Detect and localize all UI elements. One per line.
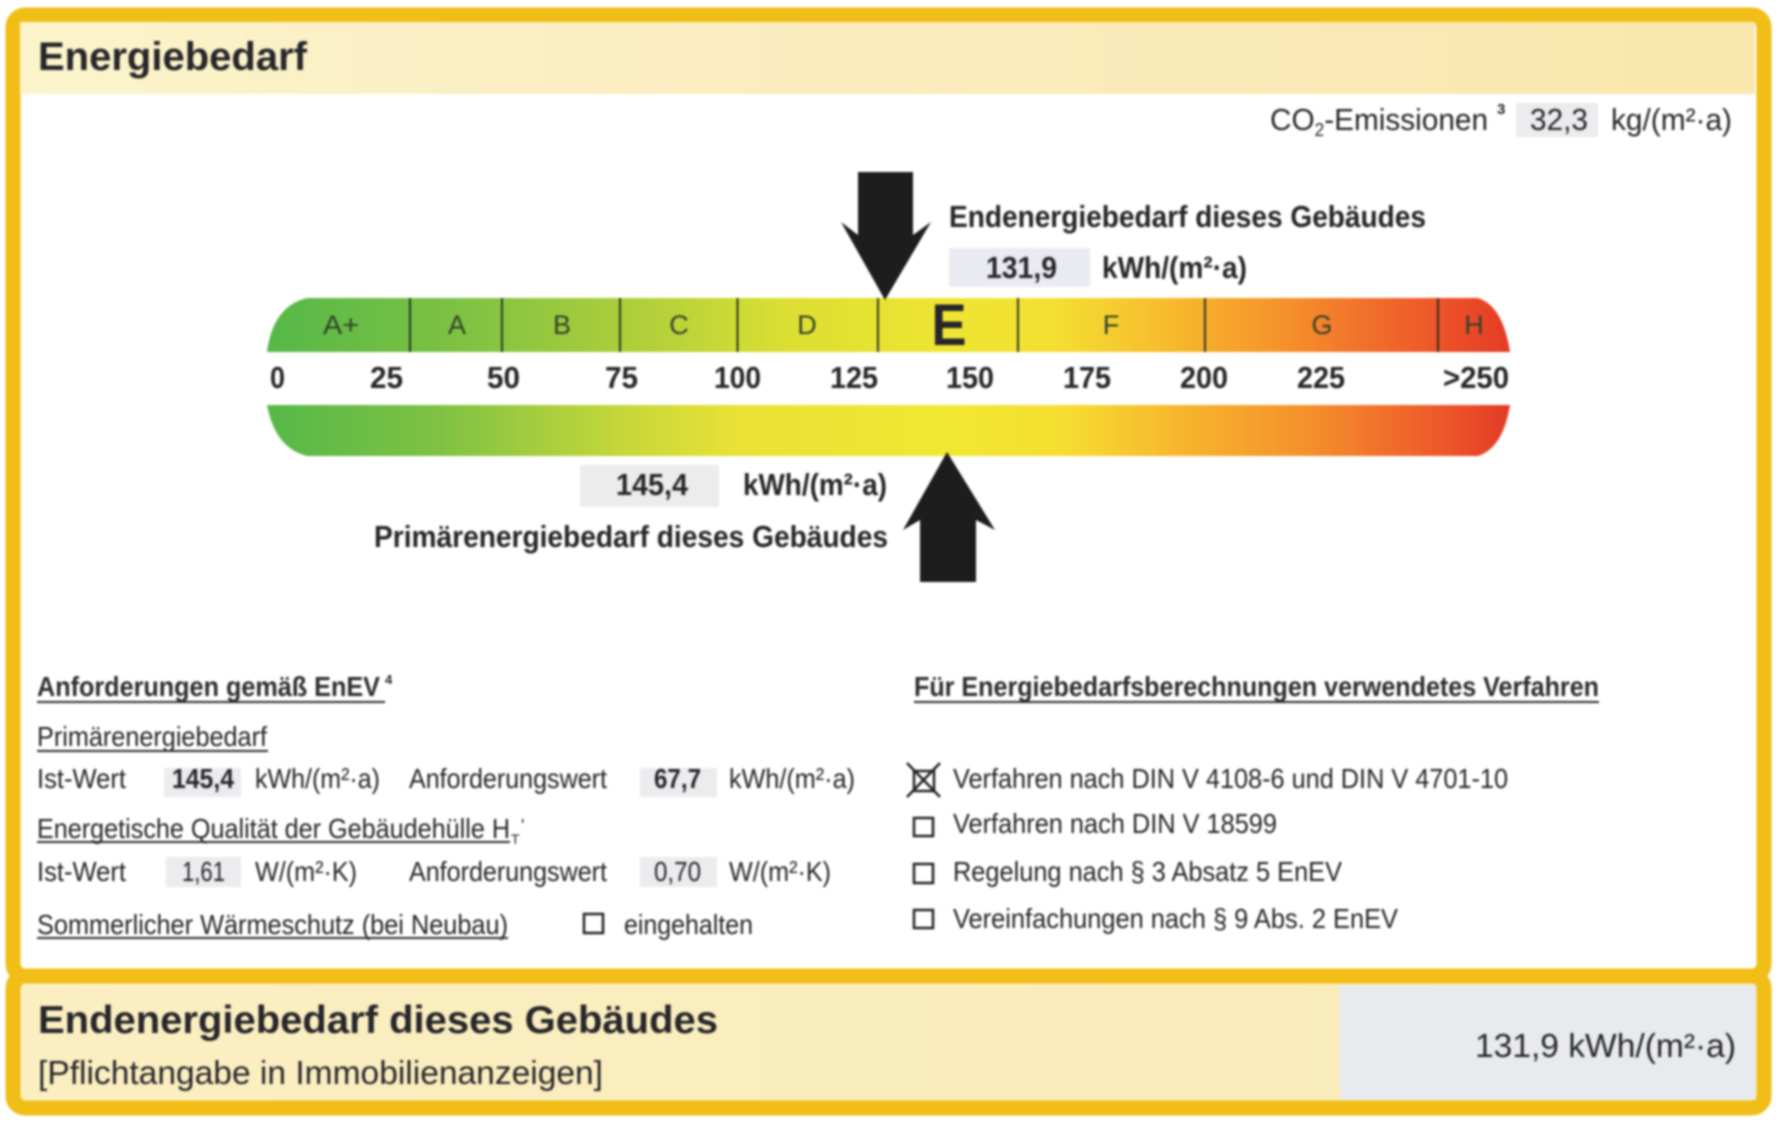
summary heading: Endenergiebedarf dieses Gebäudes <box>38 999 718 1042</box>
summer heat protection: Sommerlicher Wärmeschutz (bei Neubau) <box>37 909 508 940</box>
primary energy requirement: 145,4 <box>172 763 234 794</box>
CO2 emissions line: 32,3 <box>1530 102 1588 137</box>
building envelope quality: Ist-Wert <box>37 856 126 887</box>
summer heat protection: eingehalten <box>624 909 753 940</box>
building envelope quality <box>37 813 831 887</box>
scale numbers: >250 <box>1443 360 1509 395</box>
option: Vereinfachungen: Vereinfachungen nach § 9 Abs. 2 EnEV <box>953 903 1398 934</box>
building envelope quality: W/(m²·K) <box>729 856 831 887</box>
value field <box>1340 985 1756 1100</box>
building envelope quality: 1,61 <box>182 856 225 887</box>
scale numbers: 25 <box>370 360 403 395</box>
CO2 emissions line <box>1270 101 1732 140</box>
heading: requirements: 4 <box>385 672 393 687</box>
scale numbers: 75 <box>605 360 638 395</box>
building envelope quality: Anforderungswert <box>409 856 607 887</box>
CO2 emissions line: 3 <box>1497 101 1505 118</box>
arrow: primary energy <box>903 452 995 582</box>
energy class bar: G <box>1311 310 1333 340</box>
energy class bar <box>267 293 1510 358</box>
scale numbers: 150 <box>946 360 994 395</box>
CO2 emissions line: kg/(m²·a) <box>1611 102 1732 137</box>
building envelope quality: Energetische Qualität der Gebäudehülle H <box>37 813 510 844</box>
scale numbers <box>270 360 1509 395</box>
building envelope quality: W/(m²·K) <box>255 856 357 887</box>
primary energy label <box>374 465 888 554</box>
primary energy requirement: Ist-Wert <box>37 763 126 794</box>
option: Regelung: Regelung nach § 3 Absatz 5 EnEV <box>953 856 1342 887</box>
final energy label: Endenergiebedarf dieses Gebäudes <box>949 199 1426 234</box>
building envelope quality: 0,70 <box>654 856 701 887</box>
energy class bar: F <box>1103 310 1119 340</box>
summary value: 131,9 kWh/(m²·a) <box>1475 1027 1736 1064</box>
requirements section <box>37 671 855 940</box>
energy class bar: H <box>1464 310 1484 340</box>
energy class bar: B <box>553 310 571 340</box>
scale numbers: 100 <box>714 360 761 395</box>
heading: method: Für Energiebedarfsberechnungen verwendetes Verfahren <box>914 671 1599 702</box>
energy class bar: A <box>448 310 466 340</box>
building envelope quality: T <box>511 831 520 847</box>
primary energy label: 145,4 <box>616 467 689 502</box>
option: DIN V 4108-6 checked: Verfahren nach DIN V 4108-6 und DIN V 4701-10 <box>953 763 1508 794</box>
arrow: final energy <box>841 172 931 300</box>
primary energy label: Primärenergiebedarf dieses Gebäudes <box>374 519 888 554</box>
building envelope quality: ' <box>521 816 524 836</box>
scale numbers: 225 <box>1297 360 1345 395</box>
title: Energiebedarf <box>38 35 308 79</box>
scale numbers: 50 <box>487 360 520 395</box>
method section <box>907 671 1599 934</box>
final energy label: kWh/(m²·a) <box>1102 250 1247 285</box>
final energy label <box>949 199 1426 287</box>
scale numbers: 0 <box>270 360 285 395</box>
primary energy requirement: Primärenergiebedarf <box>37 721 267 752</box>
primary energy requirement: kWh/(m²·a) <box>255 763 380 794</box>
energy class bar: E <box>932 293 966 358</box>
primary energy label: kWh/(m²·a) <box>743 467 887 502</box>
summary note: [Pflichtangabe in Immobilienanzeigen] <box>38 1054 603 1091</box>
gradient bar <box>267 405 1510 456</box>
CO2 emissions line: CO <box>1270 102 1316 137</box>
primary energy requirement: 67,7 <box>654 763 701 794</box>
primary energy requirement: Anforderungswert <box>409 763 607 794</box>
energy class bar: A+ <box>323 310 359 340</box>
scale numbers: 125 <box>830 360 878 395</box>
final energy label: 131,9 <box>986 250 1057 285</box>
scale numbers: 200 <box>1180 360 1228 395</box>
energy class bar: D <box>797 310 817 340</box>
primary energy requirement <box>37 721 855 797</box>
CO2 emissions line: 2 <box>1315 120 1324 140</box>
heading band <box>20 22 1755 94</box>
energy class bar: C <box>669 310 689 340</box>
CO2 emissions line: -Emissionen <box>1324 102 1488 137</box>
option: DIN V 18599: Verfahren nach DIN V 18599 <box>953 808 1277 839</box>
heading: requirements: Anforderungen gemäß EnEV <box>37 671 380 702</box>
primary energy requirement: kWh/(m²·a) <box>729 763 855 794</box>
panel: final energy summary <box>13 976 1764 1108</box>
scale numbers: 175 <box>1063 360 1111 395</box>
